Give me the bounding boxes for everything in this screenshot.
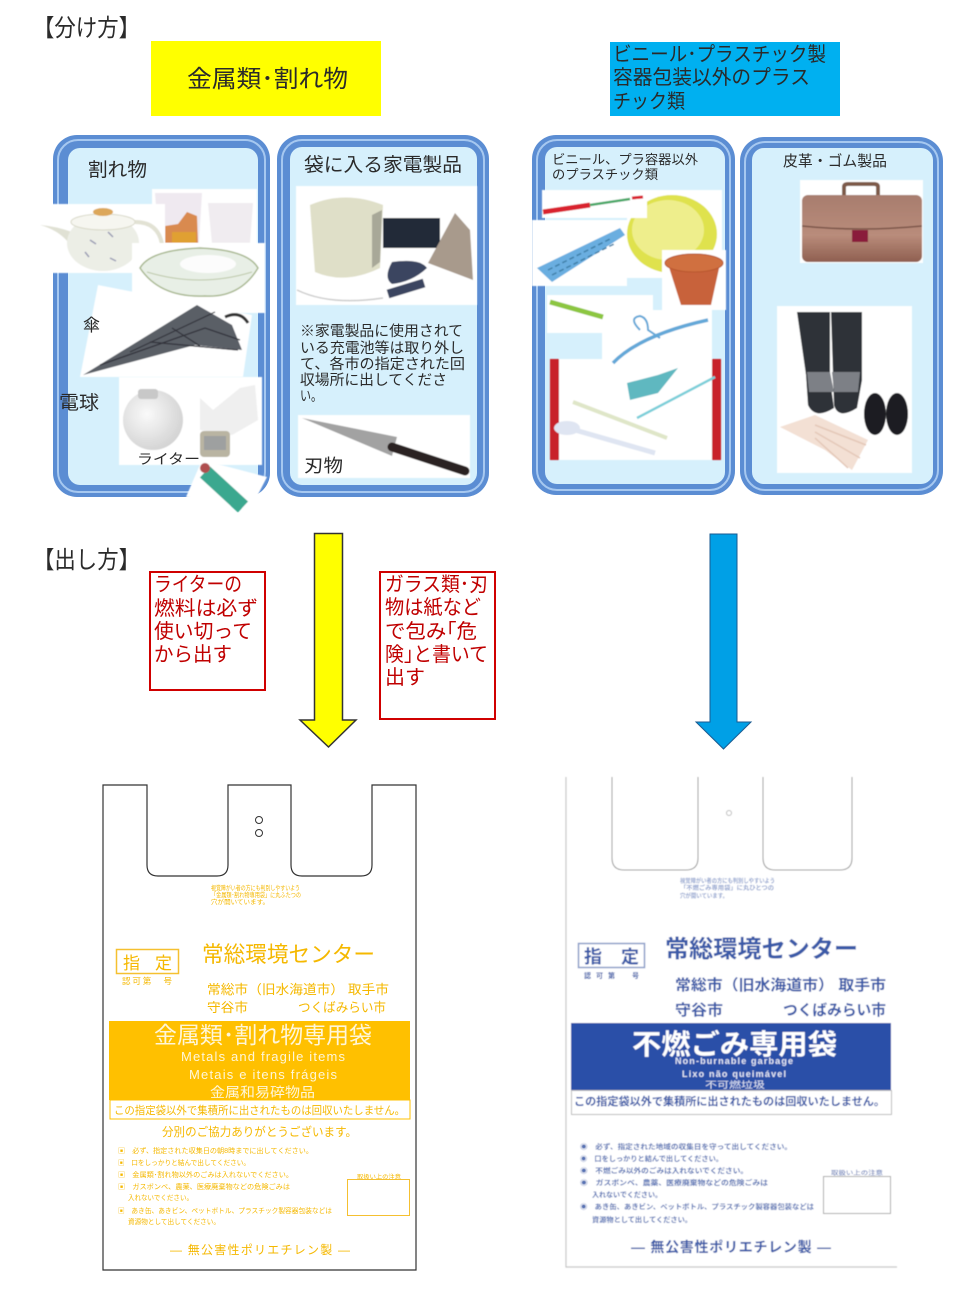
blue band: 不燃ごみ専用袋 [632, 1028, 837, 1060]
callout: wrap glass and blades: 出す [385, 666, 425, 689]
tiny notice, blue: 穴が開いています。 [680, 892, 728, 900]
heading: sorting: 【分け方】 [33, 15, 140, 42]
blue band: 不可燃垃圾 [705, 1079, 765, 1090]
municipalities: 守谷市 [207, 1000, 248, 1015]
category label: plastics [610, 42, 840, 116]
municipalities: つくばみらい市 [298, 1000, 386, 1015]
rules list, blue: ◉ 口をしっかりと結んで出してください。 [580, 1154, 723, 1163]
panel title: plastics: のプラスチック類 [552, 167, 658, 182]
label: blades: 刃物 [304, 456, 343, 476]
warning strip, blue [572, 1090, 892, 1114]
tiny notice: 視覚障がい者の方にも判別しやすいよう [211, 883, 300, 892]
photo: leather bag [800, 180, 923, 263]
callout: wrap glass and blades: ガラス類･刃 [385, 573, 488, 596]
photo: knife [298, 415, 470, 478]
callout: wrap glass and blades: 物は紙など [385, 596, 481, 619]
bag: blue designated bag [566, 777, 897, 1267]
orange band: 金属和易碎物品 [210, 1085, 315, 1100]
rules list: ▣ 金属類･割れ物以外のごみは入れないでください。 [118, 1170, 293, 1179]
tiny notice, blue [680, 877, 775, 900]
photo: glass dish [132, 243, 265, 313]
rules list: ▣ 必ず、指定された収集日の朝8時までに出してください。 [118, 1146, 313, 1155]
rules list: ▣ あき缶、あきビン、ペットボトル、プラスチック製容器包装などは [118, 1206, 332, 1215]
name box: 取扱い上の注意 [357, 1173, 401, 1181]
stamp: designated [116, 950, 178, 986]
stamp: designated: 認可第 号 [122, 976, 172, 986]
warning strip: この指定袋以外で集積所に出されたものは回収いたしません。 [114, 1103, 405, 1117]
panel title: appliances: 袋に入る家電製品 [304, 154, 462, 176]
panel title: plastics: ビニール、プラ容器以外 [552, 152, 698, 167]
stamp: designated: 指 定 [123, 954, 172, 973]
material note, blue: ― 無公害性ポリエチレン製 ― [631, 1239, 831, 1255]
name box, blue [824, 1169, 890, 1214]
orange band: 金属類･割れ物専用袋 [154, 1022, 372, 1048]
tiny notice, blue: 視覚障がい者の方にも判別しやすいよう [680, 877, 775, 885]
label: umbrella: 傘 [83, 316, 100, 335]
panel title: breakables: 割れ物 [88, 159, 147, 181]
rules list: ▣ 口をしっかりと結んで出してください。 [118, 1158, 250, 1167]
name box, blue: 取扱い上の注意 [831, 1169, 883, 1177]
orange band [109, 1021, 410, 1100]
label: lighter: ライター [137, 451, 200, 467]
panel: other plastics [532, 135, 735, 495]
municipalities, blue: つくばみらい市 [783, 1001, 886, 1019]
panel: breakables [37, 135, 270, 510]
rules list, blue: 資源物として出してください。 [592, 1215, 692, 1224]
category label: plastics: ビニール･プラスチック製 [613, 43, 826, 66]
arrow: blue down [696, 534, 751, 749]
rules list, blue: 入れないでください。 [592, 1190, 662, 1199]
callout: use up lighter fuel: 使い切って [154, 620, 252, 643]
blue band: Lixo não queimável [682, 1069, 786, 1079]
rules list: ▣ ガスボンベ、農薬、医療廃棄物などの危険ごみは [118, 1182, 290, 1191]
tiny notice: 「金属類･割れ物専用袋」に丸ふたつの [211, 890, 301, 899]
category label: plastics: 容器包装以外のプラス [613, 66, 810, 89]
category label: plastics: チック類 [613, 90, 685, 113]
municipalities, blue: 常総市（旧水海道市） 取手市 [675, 976, 886, 994]
photo: glasses [152, 189, 257, 245]
category label: metals and breakables: 金属類･割れ物 [187, 66, 348, 93]
photo: umbrella [80, 285, 252, 377]
photo: boots, shoes, gloves [777, 306, 912, 473]
panel title: plastics [552, 152, 698, 182]
panel: small appliances [277, 135, 489, 497]
note: remove batteries: て、各市の指定された回 [300, 356, 465, 373]
municipalities, blue: 守谷市 [675, 1001, 723, 1019]
tiny notice [211, 883, 301, 906]
callout: use up lighter fuel: から出す [154, 643, 232, 666]
orange band: Metals and fragile items [181, 1049, 346, 1064]
panel title: leather and rubber: 皮革・ゴム製品 [783, 152, 887, 170]
name box [348, 1173, 410, 1216]
tiny notice, blue: 「不燃ごみ専用袋」に丸ひとつの [680, 884, 774, 892]
tiny notice: 穴が開いています。 [211, 897, 269, 906]
callout: use up lighter fuel [150, 572, 265, 690]
callout: use up lighter fuel: ライターの [154, 573, 242, 596]
rules list [118, 1146, 332, 1226]
note: remove batteries: い。 [300, 389, 322, 405]
photo: light bulbs [119, 377, 262, 465]
category label: metals and breakables [151, 41, 381, 116]
note: remove batteries [300, 323, 465, 405]
issuer title: 常総環境センター [202, 942, 375, 967]
callout: wrap glass and blades: で包み｢危 [385, 620, 477, 643]
arrow: yellow down [300, 534, 356, 747]
stamp: designated, blue: 認可第 号 [584, 971, 639, 980]
rules list, blue: ◉ 不燃ごみ以外のごみは入れないでください。 [580, 1166, 748, 1175]
rules list: 資源物として出してください。 [128, 1217, 220, 1226]
photo: lighter [186, 460, 267, 510]
callout: use up lighter fuel: 燃料は必ず [154, 597, 258, 620]
photo: teapot [37, 204, 165, 273]
photo: plastic goods [532, 190, 726, 460]
municipalities [207, 982, 389, 1015]
thank you line: 分別のご協力ありがとうございます。 [162, 1124, 357, 1139]
issuer title, blue: 常総環境センター [665, 936, 858, 963]
rules list, blue: ◉ 必ず、指定された地域の収集日を守って出してください。 [580, 1142, 792, 1151]
panel: leather and rubber [740, 137, 943, 495]
material note: ― 無公害性ポリエチレン製 ― [170, 1242, 350, 1257]
heading: how to put out: 【出し方】 [33, 547, 140, 574]
note: remove batteries: ※家電製品に使用されて [300, 323, 463, 340]
blue band [571, 1023, 891, 1090]
warning strip, blue: この指定袋以外で集積所に出されたものは回収いたしません。 [574, 1094, 885, 1108]
warning strip [110, 1100, 410, 1119]
rules list, blue: ◉ あき缶、あきビン、ペットボトル、プラスチック製容器包装などは [580, 1202, 814, 1211]
stamp: designated, blue [578, 944, 644, 980]
callout: wrap glass and blades: 険｣と書いて [385, 643, 488, 666]
note: remove batteries: いる充電池等は取り外し [300, 339, 464, 357]
callout: wrap glass and blades [380, 572, 495, 719]
rules list, blue: ◉ ガスボンベ、農薬、医療廃棄物などの危険ごみは [580, 1178, 768, 1187]
municipalities: 常総市（旧水海道市） 取手市 [207, 982, 389, 997]
municipalities, blue [675, 976, 886, 1019]
blue band: Non-burnable garbage [675, 1056, 793, 1066]
label: light bulb: 電球 [59, 392, 99, 414]
orange band: Metais e itens frágeis [189, 1067, 338, 1082]
rules list, blue [580, 1142, 814, 1224]
rules list: 入れないでください。 [128, 1194, 193, 1202]
stamp: designated, blue: 指 定 [584, 946, 639, 967]
photo: appliances [296, 186, 477, 305]
bag: yellow designated bag [103, 785, 416, 1270]
note: remove batteries: 収場所に出してくださ [300, 372, 447, 389]
